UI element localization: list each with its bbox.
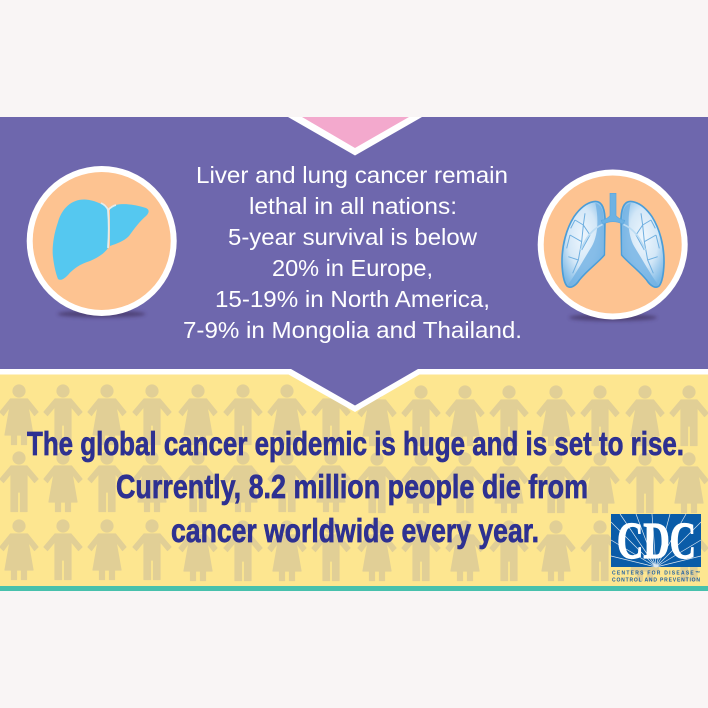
icon: liver (27, 166, 177, 318)
icon: lungs (538, 170, 688, 321)
band: yellow panel (0, 369, 708, 587)
logo: CDC: CONTROL AND PREVENTION (612, 578, 700, 584)
white divider with arrow border (0, 369, 708, 412)
text: liver and lung survival: 5-year survival is below (228, 224, 478, 250)
text: liver and lung survival: 20% in Europe, (272, 255, 433, 281)
teal bottom rule (0, 586, 708, 591)
band: purple panel with downward arrow (0, 117, 708, 406)
people pattern (0, 384, 708, 580)
pink notch at top of the purple panel (288, 117, 422, 156)
text: global cancer epidemic headline (27, 426, 684, 550)
text: liver and lung survival (183, 162, 522, 343)
logo: CDC: CENTERS FOR DISEASE™ (612, 570, 700, 576)
text: liver and lung survival: 15-19% in North America, (215, 286, 490, 312)
text: liver and lung survival: Liver and lung cancer remain (196, 162, 508, 188)
text: liver and lung survival: 7-9% in Mongolia and Thailand. (183, 317, 522, 343)
text: global cancer epidemic headline: cancer worldwide every year. (171, 513, 539, 550)
text: liver and lung survival: lethal in all nations: (249, 193, 457, 219)
text: global cancer epidemic headline: Currently, 8.2 million people die from (116, 469, 588, 506)
